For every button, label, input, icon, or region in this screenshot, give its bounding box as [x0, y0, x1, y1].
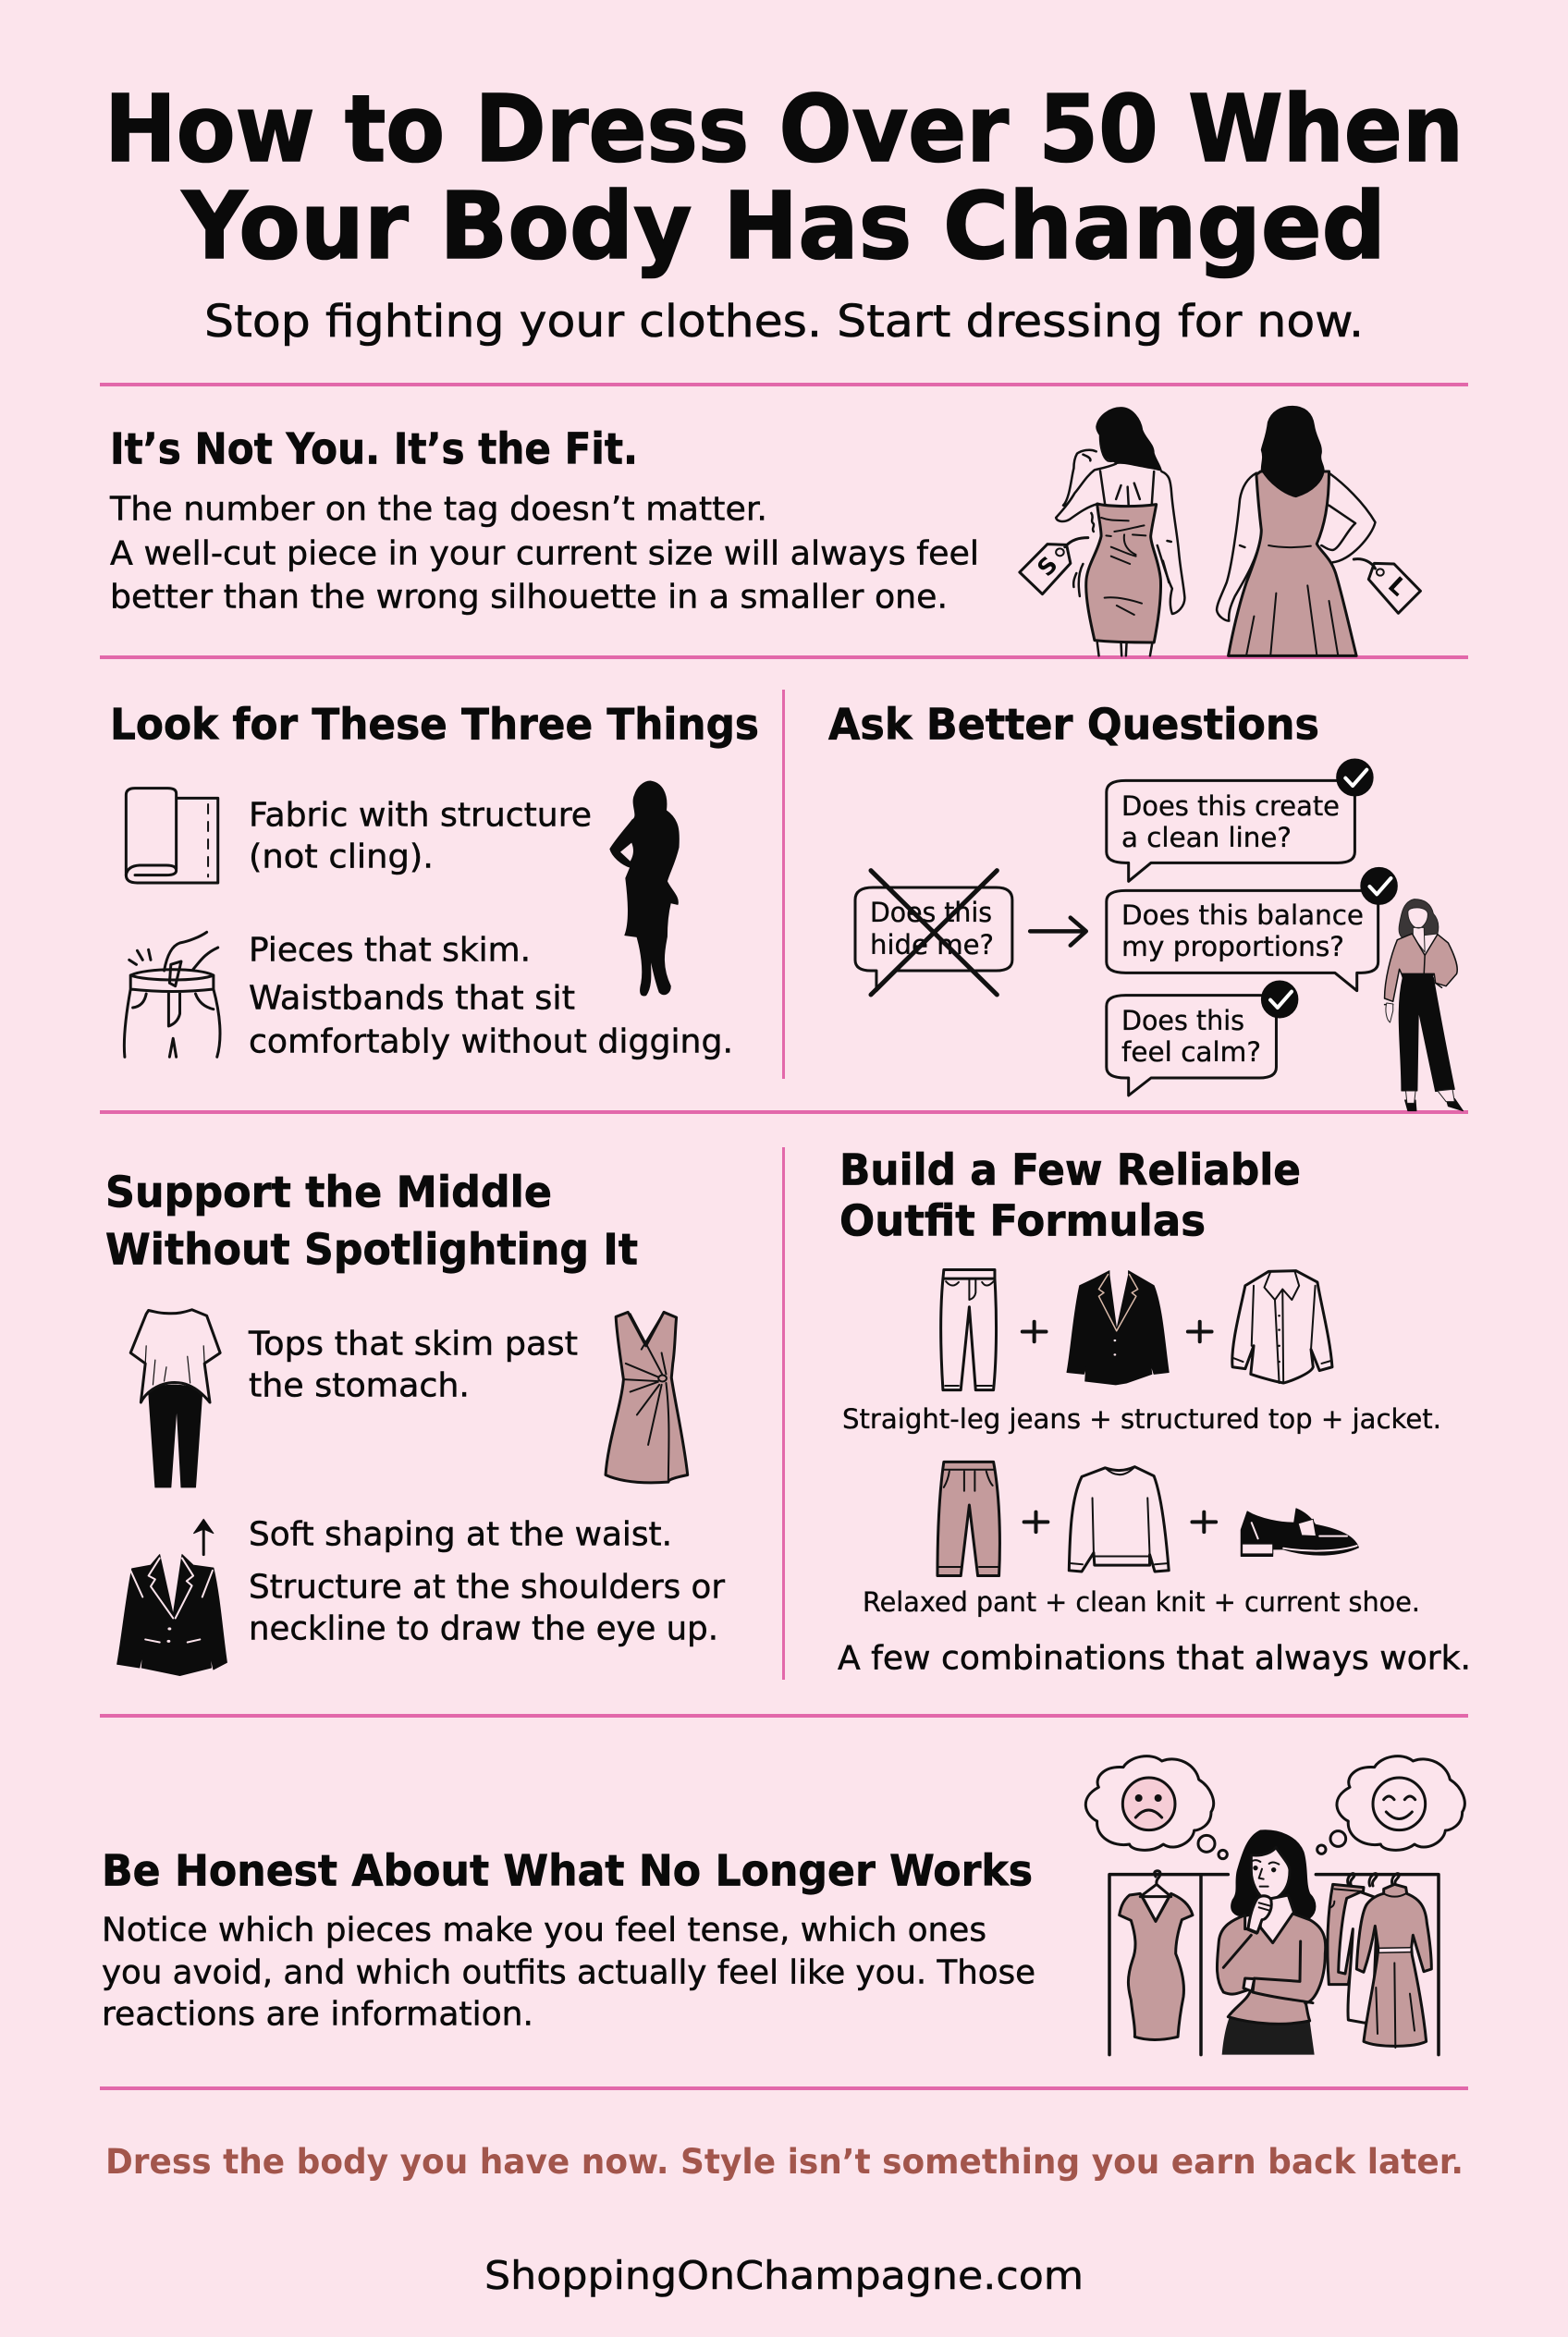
text: tops: the stomach. [249, 1366, 470, 1405]
body text: The number on the tag doesn’t matter. [109, 490, 767, 529]
thought cloud: happy [1317, 1756, 1464, 1854]
heading: Look for These Three Things [110, 699, 759, 749]
formula 1 icons [941, 1270, 1332, 1390]
text: fabric: Fabric with structure [249, 797, 592, 834]
bubble: balance [1107, 867, 1397, 991]
thinking woman [1217, 1830, 1326, 2055]
heading: Be Honest About What No Longer Works [102, 1845, 1033, 1895]
heading [839, 1144, 1301, 1246]
icon: blouse [1232, 1271, 1332, 1383]
legs [1073, 513, 1171, 655]
text: soft shaping: neckline to draw the eye up. [249, 1610, 718, 1647]
text: tops [248, 1326, 578, 1405]
panel: outfit formulas [838, 1144, 1471, 1677]
text: pieces that skim: Pieces that skim. [249, 932, 531, 969]
icon: relaxed pant [937, 1462, 999, 1576]
tag L [1354, 559, 1420, 613]
arrow [1030, 918, 1086, 946]
text: pieces that skim: comfortably without digging. [249, 1022, 733, 1061]
figure: standing woman [1385, 899, 1463, 1111]
website: ShoppingOnChampagne.com [484, 2253, 1084, 2298]
text: pieces that skim [249, 932, 733, 1061]
back skin [1100, 436, 1184, 614]
icon: waistband [124, 932, 220, 1057]
body text: you avoid, and which outfits actually feel like you. Those [102, 1954, 1035, 1991]
icon: knit sweater [1069, 1467, 1169, 1572]
right rack and clothes [1316, 1874, 1439, 2055]
panel: it's the fit [109, 406, 1420, 655]
hair [1096, 408, 1161, 471]
illustration: tight dress vs well-fit dress [1020, 406, 1420, 655]
right arms [1217, 473, 1375, 621]
left rack and dress [1109, 1871, 1228, 2055]
icon: jeans [941, 1270, 997, 1390]
subtitle: Stop fighting your clothes. Start dressing for now. [204, 296, 1364, 348]
body text: Notice which pieces make you feel tense, which ones [102, 1912, 986, 1949]
heading [105, 1167, 638, 1274]
bubble: calm: Does this [1121, 1005, 1244, 1036]
panel: support the middle [105, 1167, 725, 1675]
formula 2 caption: Relaxed pant + clean knit + current shoe. [863, 1586, 1420, 1618]
illustration: tight dress vs well-fit dress: L [1383, 571, 1412, 601]
icon: blazer [1067, 1271, 1169, 1385]
crossed-out bubble [855, 871, 1012, 995]
icon: loose top and pants [130, 1310, 220, 1487]
text: pieces that skim: Waistbands that sit [249, 980, 575, 1017]
heading: Without Spotlighting It [105, 1224, 638, 1274]
text: soft shaping: Soft shaping at the waist. [249, 1516, 672, 1553]
bubble: balance: my proportions? [1121, 931, 1344, 962]
text: tops: Tops that skim past [248, 1326, 578, 1363]
heading: Support the Middle [105, 1167, 552, 1217]
bubble: clean line [1107, 759, 1373, 881]
formula 1 caption: Straight-leg jeans + structured top + jacket. [842, 1403, 1441, 1435]
body text: better than the wrong silhouette in a smaller one. [110, 579, 948, 616]
tight dress [1086, 504, 1161, 642]
thought cloud: sad [1085, 1756, 1227, 1859]
bubble: calm [1107, 981, 1298, 1095]
crossed-out bubble: Does this [870, 897, 992, 928]
illustration: closet and thinking woman [1085, 1756, 1464, 2055]
panel: be honest [102, 1756, 1464, 2055]
title [104, 75, 1464, 280]
icon: fabric roll [126, 789, 218, 883]
text: soft shaping: Structure at the shoulders or [249, 1568, 725, 1607]
bubble: clean line: a clean line? [1121, 822, 1292, 853]
title: Your Body Has Changed [181, 172, 1386, 280]
icon: blazer [117, 1555, 227, 1675]
body text: A well-cut piece in your current size will always feel [110, 534, 979, 573]
formula 2 icons [937, 1462, 1358, 1576]
bubble: balance: Does this balance [1121, 899, 1364, 931]
icon: loafer [1241, 1509, 1358, 1556]
icon: woman silhouette [610, 781, 679, 996]
crossed-out bubble: hide me? [870, 929, 994, 960]
text: fabric [249, 797, 592, 876]
text: soft shaping [249, 1516, 725, 1647]
text: fabric: (not cling). [249, 838, 434, 876]
panel: look for these three things [110, 699, 759, 1061]
tag S [1020, 538, 1088, 594]
hair [1261, 406, 1324, 497]
body text: reactions are information. [102, 1995, 533, 2034]
panel: ask better questions [828, 699, 1463, 1111]
icon: wrap dress [606, 1312, 688, 1483]
body text [102, 1912, 1035, 2034]
heading: Build a Few Reliable [839, 1144, 1301, 1194]
tagline: Dress the body you have now. Style isn’t something you earn back later. [105, 2142, 1464, 2182]
bubble: calm: feel calm? [1121, 1036, 1261, 1068]
heading: Outfit Formulas [839, 1196, 1206, 1246]
flared dress [1229, 471, 1356, 655]
heading: It’s Not You. It’s the Fit. [110, 423, 638, 473]
arrow [194, 1519, 214, 1555]
illustration: tight dress vs well-fit dress: S [1032, 551, 1063, 581]
left arm raised [1056, 450, 1116, 521]
closing line: A few combinations that always work. [838, 1640, 1471, 1677]
heading: Ask Better Questions [828, 699, 1319, 749]
body text [109, 490, 979, 616]
bubble: clean line: Does this create [1121, 790, 1340, 822]
title: How to Dress Over 50 When [104, 75, 1464, 183]
